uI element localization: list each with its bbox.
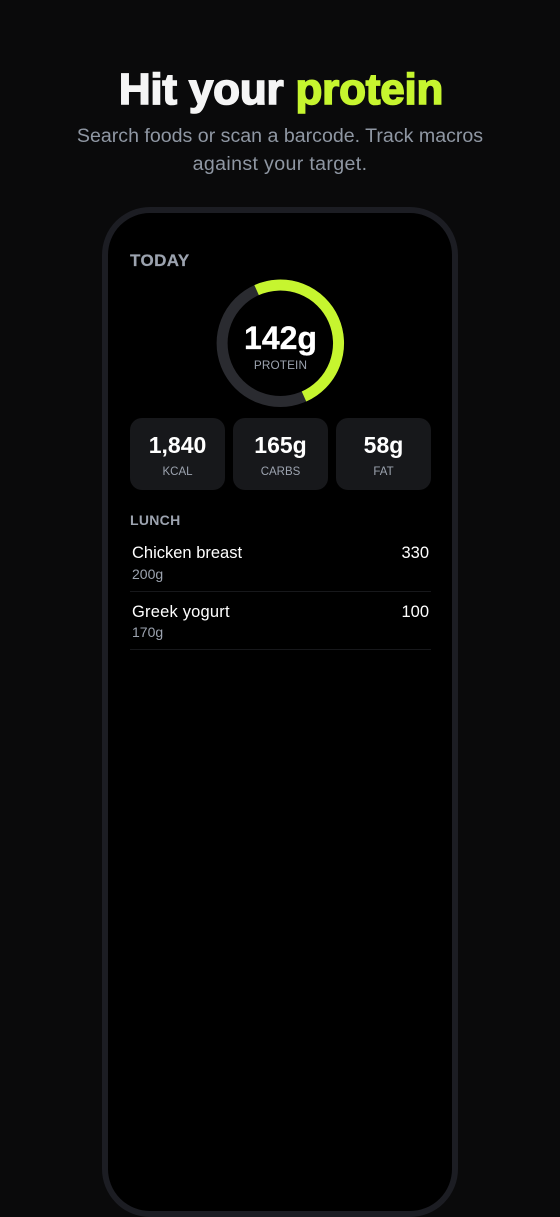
stat card: fat: FAT bbox=[373, 466, 394, 478]
ring label: PROTEIN bbox=[254, 358, 307, 372]
heading: today: TODAY bbox=[130, 251, 190, 270]
stat card: carbs: CARBS bbox=[261, 466, 300, 478]
ring value: 142g bbox=[244, 320, 317, 356]
stat card: carbs: 165g bbox=[254, 432, 307, 458]
stat card: fat bbox=[336, 418, 431, 490]
subtitle: against your target. bbox=[193, 153, 367, 175]
stat card: carbs bbox=[233, 418, 328, 490]
subtitle bbox=[77, 125, 483, 175]
panel: phone frame bbox=[102, 207, 458, 1217]
food row: chicken breast: 330 bbox=[401, 544, 429, 562]
subtitle: Search foods or scan a barcode. Track macros bbox=[77, 125, 483, 147]
stat card: kcal bbox=[130, 418, 225, 490]
heading: lunch: LUNCH bbox=[130, 512, 180, 528]
food row: greek yogurt: 170g bbox=[132, 624, 163, 640]
food row: greek yogurt bbox=[132, 603, 429, 640]
stat card: fat: 58g bbox=[364, 432, 403, 458]
stat card: kcal: KCAL bbox=[162, 466, 193, 478]
food row: chicken breast: Chicken breast bbox=[132, 544, 242, 562]
food row: greek yogurt: 100 bbox=[401, 603, 429, 621]
title: Hit your protein bbox=[119, 65, 443, 114]
food row: chicken breast bbox=[132, 544, 429, 582]
stat card: kcal: 1,840 bbox=[149, 432, 206, 458]
chart: protein ring bbox=[216, 280, 344, 407]
food row: greek yogurt: Greek yogurt bbox=[132, 603, 230, 621]
food row: chicken breast: 200g bbox=[132, 566, 163, 582]
